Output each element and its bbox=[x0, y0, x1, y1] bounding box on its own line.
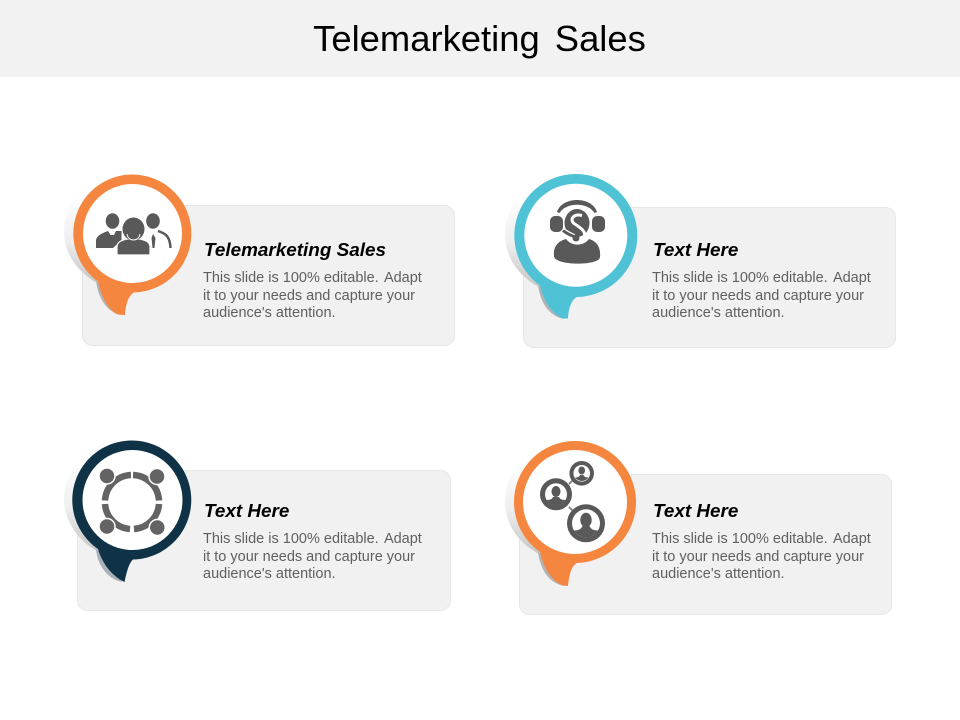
pin: teal bbox=[514, 174, 637, 318]
body text: This slide is 100% editable. Adapt bbox=[203, 531, 422, 547]
body text: audience's attention. bbox=[203, 566, 336, 582]
body text: audience's attention. bbox=[203, 305, 336, 321]
card background bbox=[82, 206, 454, 346]
pin: orange bbox=[514, 441, 636, 586]
pin: orange bbox=[73, 175, 191, 315]
body text: audience's attention. bbox=[652, 566, 785, 582]
heading: Text Here bbox=[204, 501, 289, 522]
body text: This slide is 100% editable. Adapt bbox=[652, 531, 871, 547]
user bubble small bbox=[569, 461, 594, 486]
panel: telemarketing sales bbox=[64, 175, 454, 346]
user bubble large bbox=[567, 504, 605, 542]
connectors bbox=[569, 480, 573, 511]
pin white centre bbox=[83, 184, 182, 283]
tail shadow bbox=[538, 552, 564, 586]
icon: business team bbox=[96, 213, 170, 255]
heading: Text Here bbox=[653, 240, 738, 261]
icon: headset agent bbox=[550, 200, 605, 264]
panel: text here top right bbox=[505, 174, 896, 348]
tail shadow bbox=[538, 285, 564, 319]
body text: it to your needs and capture your bbox=[203, 549, 415, 565]
panel: text here bottom left bbox=[64, 441, 450, 610]
icon: circle of people bbox=[99, 468, 165, 536]
body text: it to your needs and capture your bbox=[652, 288, 864, 304]
body text: This slide is 100% editable. Adapt bbox=[652, 270, 871, 286]
body text bbox=[652, 270, 871, 321]
pin shadow bbox=[64, 187, 132, 283]
title banner bbox=[0, 0, 960, 77]
body text: it to your needs and capture your bbox=[203, 288, 415, 304]
card background bbox=[520, 474, 892, 614]
pin shadow bbox=[64, 454, 132, 551]
icon: connected users bbox=[540, 461, 605, 542]
panel: text here bottom right bbox=[505, 441, 892, 614]
body text: it to your needs and capture your bbox=[652, 549, 864, 565]
heading: Telemarketing Sales bbox=[204, 240, 386, 261]
pin shadow bbox=[505, 455, 575, 554]
body text bbox=[203, 270, 422, 321]
title: Telemarketing Sales bbox=[313, 18, 646, 59]
pin: navy bbox=[72, 441, 191, 582]
body text bbox=[652, 531, 871, 582]
user bubble medium bbox=[540, 478, 572, 510]
pin shadow bbox=[505, 188, 575, 287]
body text: This slide is 100% editable. Adapt bbox=[203, 270, 422, 286]
pin white centre bbox=[523, 450, 627, 554]
heading: Text Here bbox=[653, 501, 738, 522]
body text: audience's attention. bbox=[652, 305, 785, 321]
card background bbox=[78, 470, 450, 610]
body text bbox=[203, 531, 422, 582]
pin white centre bbox=[524, 184, 627, 287]
pin white centre bbox=[82, 450, 182, 550]
card background bbox=[524, 208, 896, 348]
tail shadow bbox=[96, 549, 122, 582]
tail shadow bbox=[96, 281, 121, 315]
